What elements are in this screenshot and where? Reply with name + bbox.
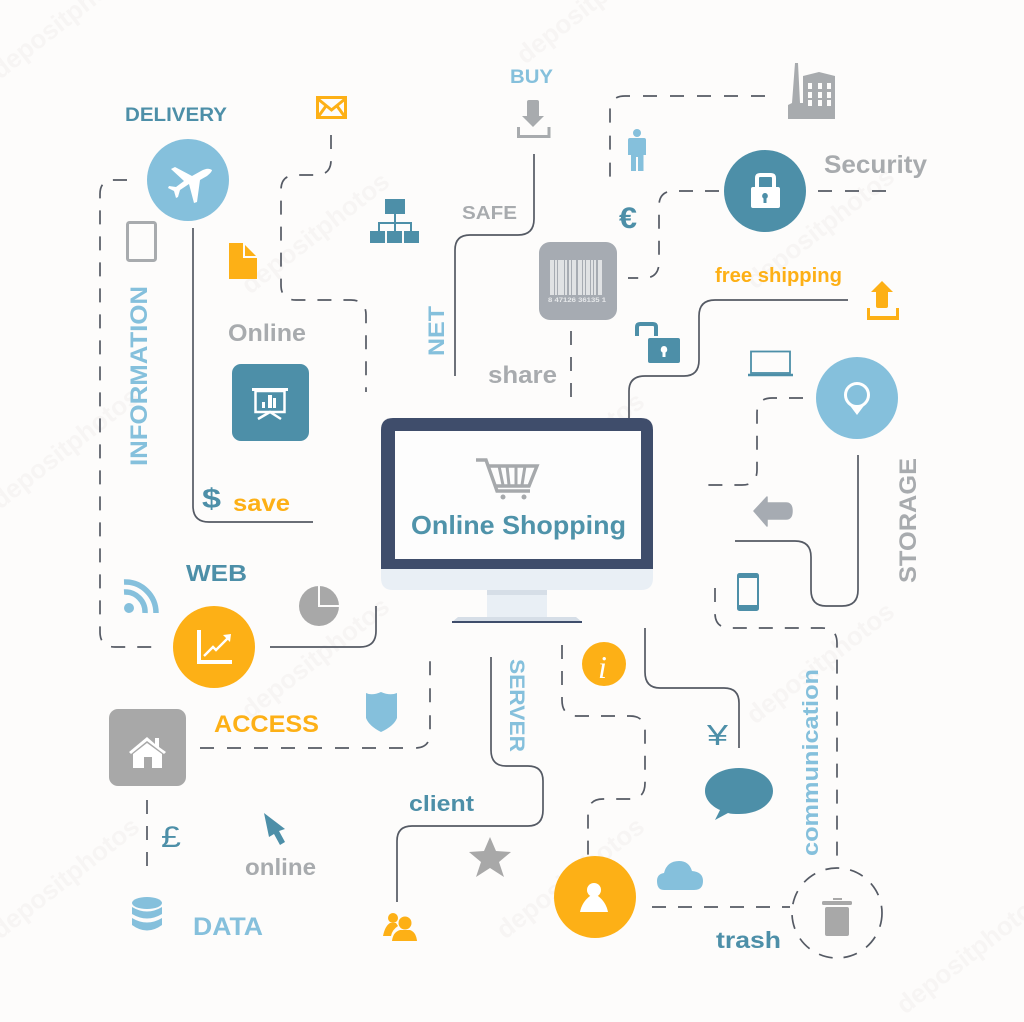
rss arcs <box>124 582 156 613</box>
label: web: WEB <box>186 560 247 586</box>
label: storage: STORAGE <box>895 458 922 583</box>
dashed line: phone to trash <box>715 588 837 868</box>
solid line: server to client <box>397 657 543 902</box>
solid line: storage to monitor <box>735 455 858 606</box>
location pin tip <box>848 403 866 415</box>
icon: rss <box>124 582 156 613</box>
icon: star <box>469 837 511 877</box>
label: access: ACCESS <box>214 711 319 738</box>
padlock shackle <box>757 175 774 188</box>
label: online heading: Online <box>228 320 306 347</box>
icon: download <box>518 100 549 136</box>
barcode digits: 8 47126 36135 1 <box>548 298 607 304</box>
label: free shipping: free shipping <box>715 265 842 287</box>
growth arrow <box>204 638 228 656</box>
dashed line: barcode to monitor <box>570 331 572 398</box>
icon: factory <box>788 63 835 119</box>
label: net: NET <box>424 305 449 356</box>
text: depositphotos <box>740 596 900 730</box>
monitor screen <box>395 431 641 559</box>
icon: location pin circle <box>816 357 898 439</box>
solid line: delivery to save <box>193 228 313 522</box>
icon: chart circle <box>173 606 255 688</box>
label: trash: trash <box>716 927 781 953</box>
icon: cursor <box>264 813 285 845</box>
monitor stand <box>487 590 547 618</box>
icon: person circle <box>554 856 636 938</box>
icon: shield <box>366 692 397 732</box>
icon: airplane circle <box>147 139 229 221</box>
icon: cloud <box>657 861 703 890</box>
person body <box>580 896 608 912</box>
solid line: monitor to bubble <box>645 628 739 748</box>
stand shadow <box>487 590 547 595</box>
person head <box>587 883 601 897</box>
solid line: free shipping to monitor <box>629 300 848 418</box>
title: online shopping: Online Shopping <box>411 510 626 540</box>
axes <box>199 630 232 662</box>
dashed line: factory <box>610 96 765 180</box>
icon: open padlock <box>637 324 680 363</box>
icon: home tile <box>109 709 186 786</box>
icon: presentation tile <box>232 364 309 441</box>
dashed line: person to trash <box>652 906 790 908</box>
location pin ring <box>846 384 868 406</box>
dashed line: lock to barcode <box>628 191 719 278</box>
connector lines <box>100 96 888 958</box>
icon: smartphone <box>737 573 759 611</box>
padlock body <box>751 187 780 208</box>
label: delivery: DELIVERY <box>125 105 227 126</box>
icon: speech bubble <box>705 768 773 820</box>
icon: document <box>229 243 257 279</box>
icon: dollar: $ <box>202 483 222 514</box>
dashed line: pin to monitor <box>697 398 803 485</box>
text: depositphotos <box>235 591 395 725</box>
monitor chin <box>381 568 653 590</box>
base line <box>452 621 582 623</box>
icon: laptop <box>748 352 793 375</box>
icon: envelope <box>318 98 346 118</box>
board bars <box>262 395 276 408</box>
letter i: i <box>598 649 607 685</box>
label: online: online <box>245 854 316 880</box>
dashed line: info to person <box>562 645 645 855</box>
text: depositphotos <box>490 811 650 945</box>
icon: info circle <box>582 642 626 686</box>
label: share: share <box>488 362 557 389</box>
label: security: Security <box>824 151 927 179</box>
label: buy: BUY <box>510 67 553 88</box>
icon: yen: ¥ <box>706 720 729 752</box>
monitor with online shopping screen <box>381 418 653 623</box>
keyhole <box>762 193 768 203</box>
dashed circle around trash <box>792 868 882 958</box>
text: depositphotos <box>740 161 900 295</box>
label: client: client <box>409 791 475 816</box>
dashed line: home to monitor <box>200 655 430 748</box>
icon: tablet <box>128 222 156 260</box>
icon: shopping cart <box>476 460 537 500</box>
icon: padlock circle <box>724 150 806 232</box>
label: save: save <box>233 490 290 516</box>
barcode bars <box>551 260 601 295</box>
icon: person standing <box>628 129 646 171</box>
house <box>129 737 166 768</box>
icon: database <box>132 897 162 930</box>
airplane <box>168 167 212 203</box>
dashed line: security <box>818 190 888 192</box>
label: information: INFORMATION <box>126 286 153 466</box>
icon: org chart <box>370 199 419 243</box>
dashed line: delivery to web <box>100 180 158 647</box>
icon: upload <box>867 281 899 320</box>
label: server: SERVER <box>505 659 528 752</box>
icon: barcode tile <box>539 242 617 320</box>
text: depositphotos <box>490 386 650 520</box>
label: data: DATA <box>193 913 263 941</box>
phone screen <box>739 578 757 605</box>
dashed line: envelope to monitor <box>281 135 366 392</box>
icon: trash can <box>822 898 852 936</box>
icon: pie chart <box>299 586 339 626</box>
solid line: web to monitor <box>270 606 376 647</box>
monitor bezel <box>381 418 653 569</box>
icon: euro: € <box>619 202 637 235</box>
icon: left arrow <box>754 497 792 526</box>
pie slice cut <box>319 586 339 606</box>
icon: users <box>383 913 417 941</box>
monitor base <box>452 617 582 622</box>
label: safe: SAFE <box>462 203 517 223</box>
factory windows <box>808 83 831 106</box>
dashed line: home to data <box>146 800 148 870</box>
presentation board <box>252 390 288 419</box>
text: depositphotos <box>235 166 395 300</box>
icon: pound: £ <box>161 821 181 854</box>
label: communication: communication <box>798 669 823 856</box>
solid line: buy to net <box>455 154 534 376</box>
